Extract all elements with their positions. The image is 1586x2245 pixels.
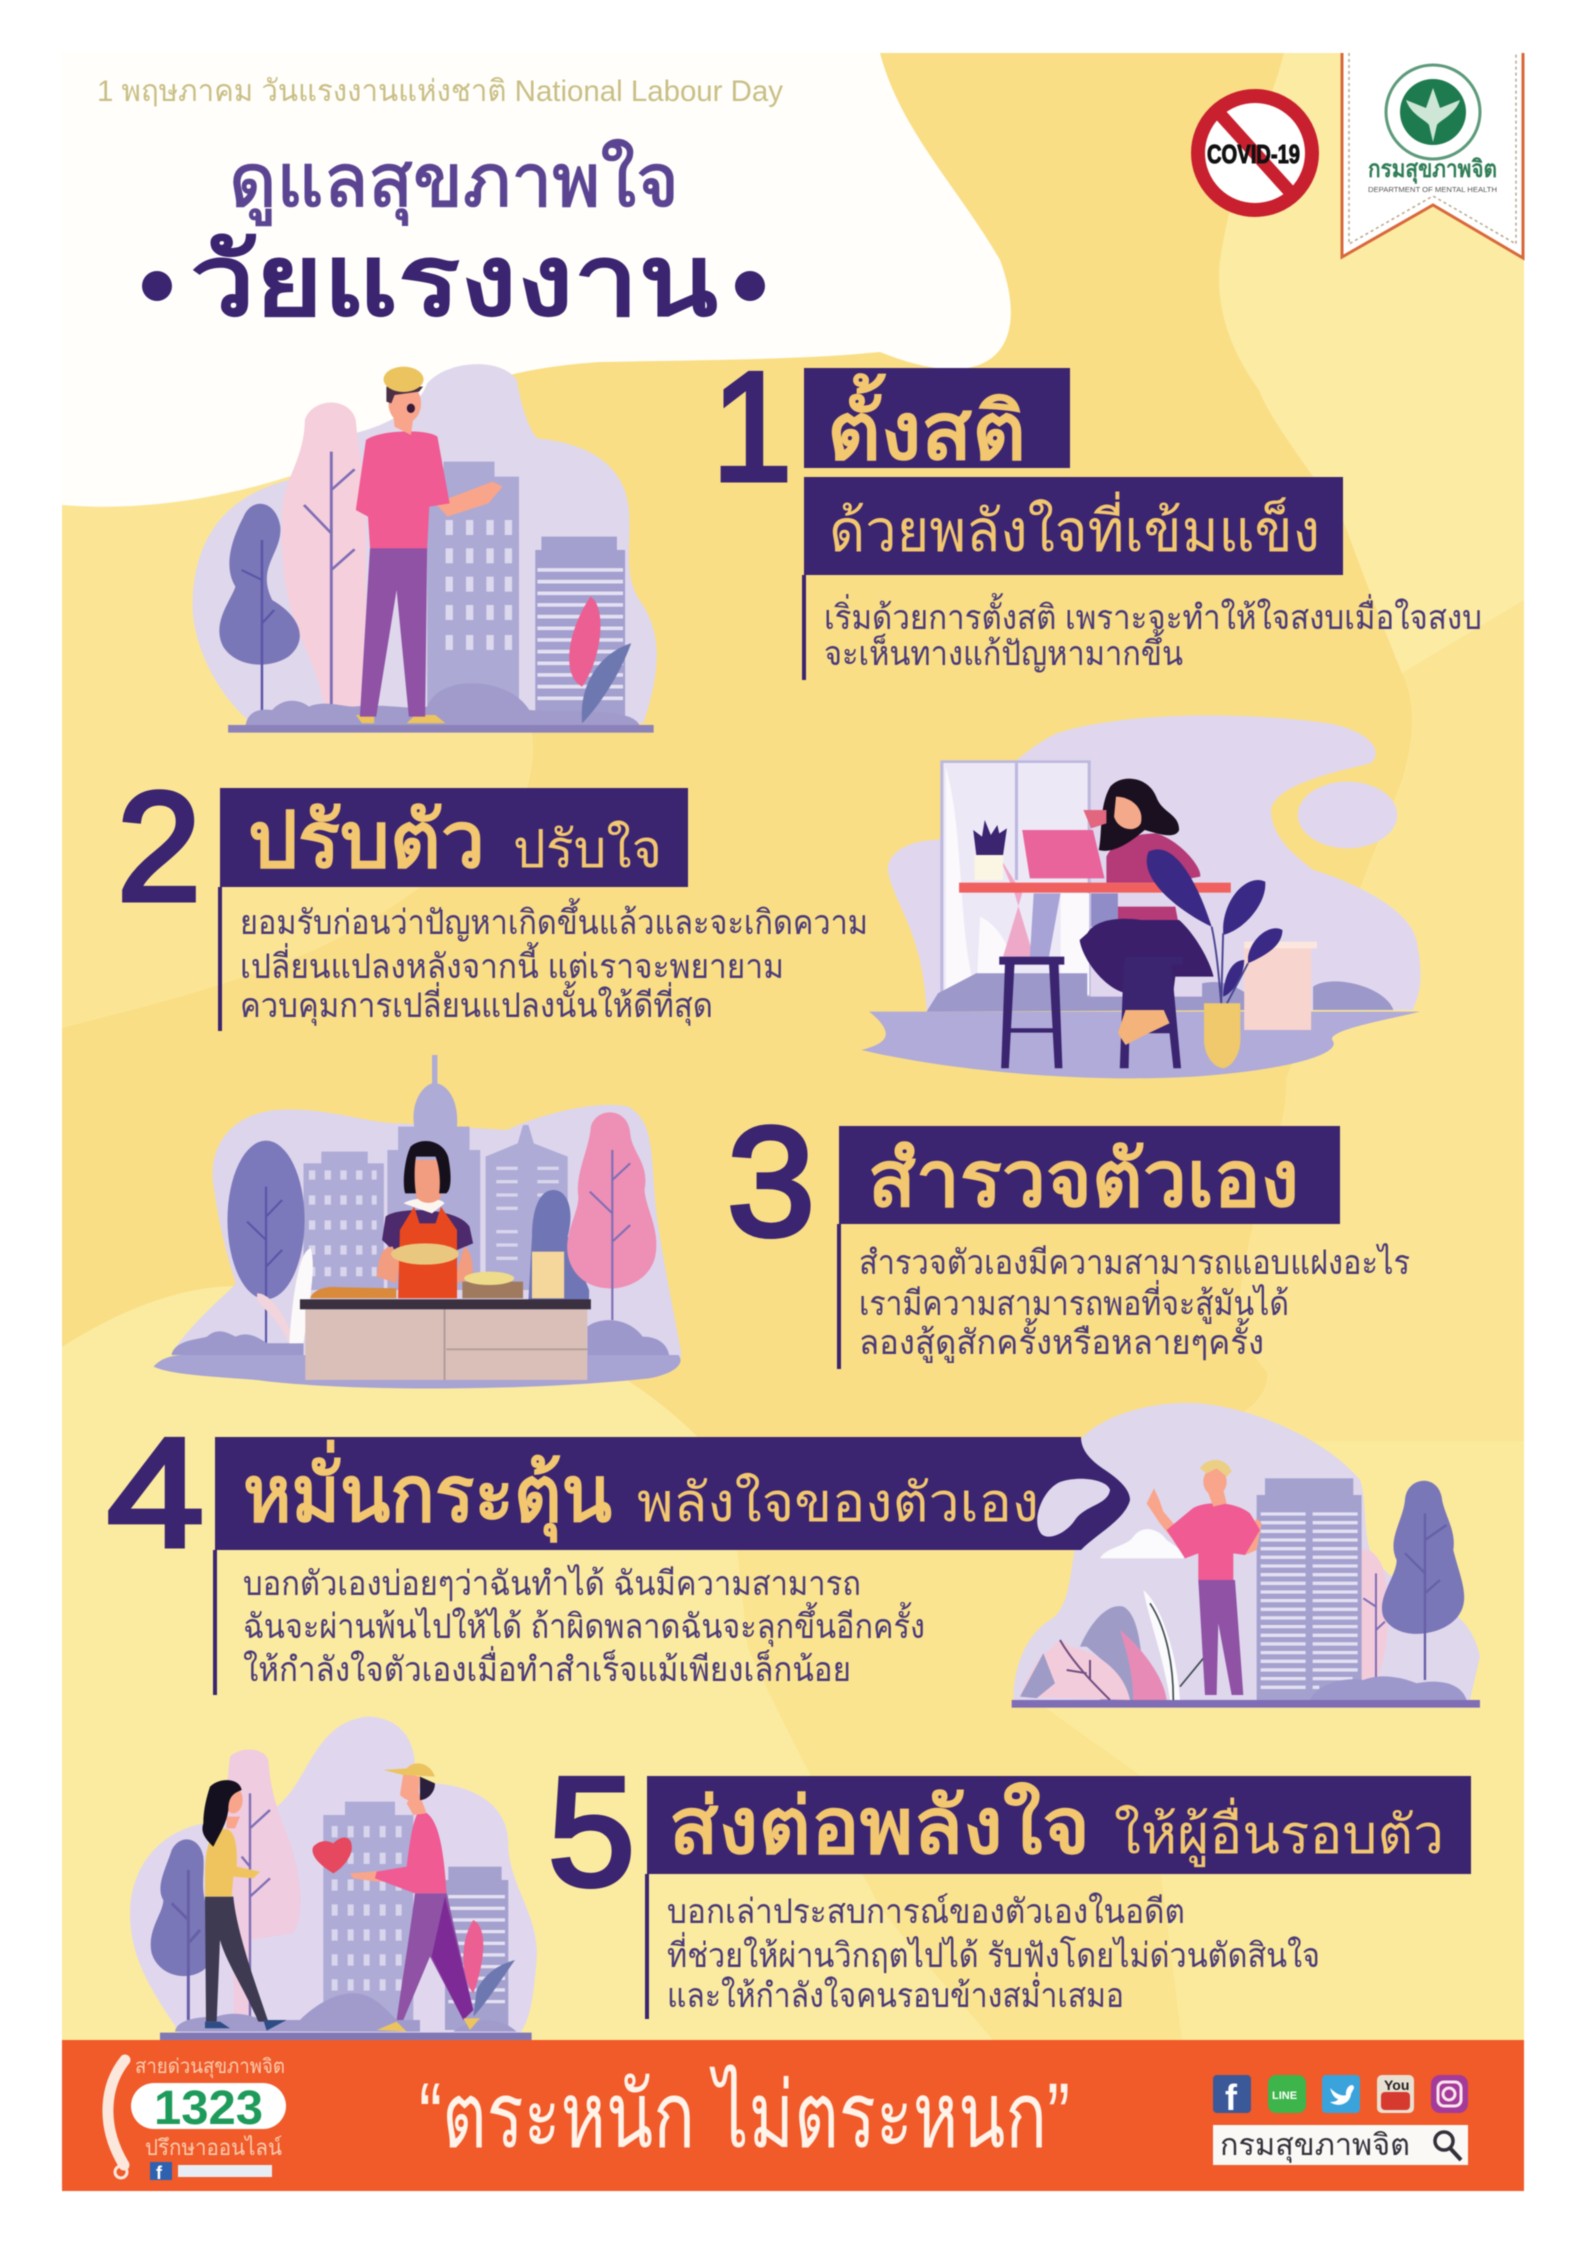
heading box 4 with wave tail: หมั่นกระตุ้น	[243, 1439, 612, 1543]
illustration 2: woman at laptop	[861, 715, 1421, 1078]
heading box 3: สำรวจตัวเอง	[868, 1135, 1299, 1223]
hotline block: f	[156, 2163, 163, 2183]
body text 3	[859, 1243, 1410, 1363]
body text 2: ยอมรับก่อนว่าปัญหาเกิดขึ้นแล้วและจะเกิดความ	[240, 898, 868, 942]
search bar: กรมสุขภาพจิต	[1220, 2129, 1410, 2164]
title: วัยแรงงาน	[190, 225, 718, 337]
number 3: 3	[727, 1095, 815, 1268]
body text 2	[240, 898, 868, 1026]
heading box 2: ปรับใจ	[513, 820, 662, 879]
header date line: 1 พฤษภาคม วันแรงงานแห่งชาติ National Labour Day	[97, 75, 783, 108]
heading box: strong willpower	[804, 477, 1343, 575]
white blob	[62, 53, 1011, 507]
body text 1	[824, 593, 1482, 673]
illustration 3: woman at kitchen counter	[154, 1055, 682, 1389]
heading box 5	[647, 1776, 1471, 1874]
heading box 2	[220, 788, 688, 887]
search bar	[1213, 2125, 1468, 2165]
heading box: tang sati: ตั้งสติ	[827, 373, 1026, 476]
body text 5: บอกเล่าประสบการณ์ของตัวเองในอดีต	[667, 1892, 1185, 1931]
number 5: 5	[548, 1745, 635, 1918]
social icons: LINE	[1272, 2090, 1297, 2102]
body text 1: เริ่มด้วยการตั้งสติ เพราะจะทำให้ใจสงบเมื่อใจสงบ	[824, 593, 1482, 637]
footer band	[62, 2040, 1524, 2191]
body text 2: ควบคุมการเปลี่ยนแปลงนั้นให้ดีที่สุด	[240, 981, 713, 1026]
social icons: f	[1225, 2077, 1238, 2118]
body text 4: ให้กำลังใจตัวเองเมื่อทำสำเร็จแม้เพียงเล็กน้อย	[243, 1646, 851, 1689]
body text 5: และให้กำลังใจคนรอบข้างสม่ำเสมอ	[667, 1972, 1124, 2015]
title	[142, 139, 765, 337]
step 2	[117, 760, 868, 1031]
social icons	[1213, 2075, 1468, 2118]
body text 4: บอกตัวเองบ่อยๆว่าฉันทำได้ ฉันมีความสามารถ	[243, 1564, 861, 1603]
title: ดูแลสุขภาพใจ	[229, 139, 679, 226]
hotline block	[108, 2056, 286, 2183]
body text 4	[243, 1564, 925, 1689]
hotline block: 1323	[154, 2082, 263, 2135]
step 4	[107, 1406, 1130, 1695]
heading box: strong willpower: ด้วยพลังใจที่เข้มแข็ง	[829, 491, 1320, 564]
illustration 1: man in city	[192, 364, 657, 733]
logo banner: department of mental health: กรมสุขภาพจิต	[1368, 156, 1497, 185]
logo banner: department of mental health: DEPARTMENT OF MENTAL HEALTH	[1368, 187, 1497, 194]
icon: no covid badge: COVID-19	[1207, 139, 1300, 169]
body text 5: ที่ช่วยให้ผ่านวิกฤตไปได้ รับฟังโดยไม่ด่วนตัดสินใจ	[667, 1932, 1320, 1975]
heading box 4 with wave tail: พลังใจของตัวเอง	[637, 1472, 1039, 1533]
step 1	[712, 340, 1482, 680]
body text 5	[667, 1892, 1320, 2015]
hotline block: ปรึกษาออนไลน์	[145, 2135, 282, 2160]
number 1: 1	[712, 340, 792, 513]
hotline block: สายด่วนสุขภาพจิต	[135, 2056, 285, 2079]
social icons: You	[1384, 2077, 1409, 2093]
heading box: tang sati	[804, 368, 1070, 476]
illustration 5: two people with heart	[130, 1717, 537, 2040]
logo banner: department of mental health	[1342, 53, 1523, 258]
number 2: 2	[117, 760, 201, 933]
body text 3: เรามีความสามารถพอที่จะสู้มันได้	[859, 1280, 1289, 1324]
illustration 4: man waving	[1012, 1403, 1480, 1708]
body text 3: สำรวจตัวเองมีความสามารถแอบแฝงอะไร	[859, 1243, 1410, 1282]
heading box 5: ให้ผู้อื่นรอบตัว	[1114, 1797, 1444, 1867]
icon: no covid badge	[1198, 96, 1312, 210]
heading box 5: ส่งต่อพลังใจ	[669, 1781, 1090, 1870]
body text 3: ลองสู้ดูสักครั้งหรือหลายๆครั้ง	[859, 1318, 1264, 1363]
number 4: 4	[107, 1406, 204, 1579]
body text 4: ฉันจะผ่านพ้นไปให้ได้ ถ้าผิดพลาดฉันจะลุกขึ้นอีกครั้ง	[243, 1602, 925, 1647]
step 5	[548, 1745, 1471, 2019]
step 3	[727, 1095, 1410, 1369]
body text 2: เปลี่ยนแปลงหลังจากนี้ แต่เราจะพยายาม	[240, 942, 784, 986]
slogan: “ตระหนัก ไม่ตระหนก”	[419, 2065, 1070, 2167]
heading box 2: ปรับตัว	[248, 796, 485, 884]
heading box 4 with wave tail	[215, 1437, 1130, 1550]
body text 1: จะเห็นทางแก้ปัญหามากขึ้น	[824, 629, 1183, 673]
